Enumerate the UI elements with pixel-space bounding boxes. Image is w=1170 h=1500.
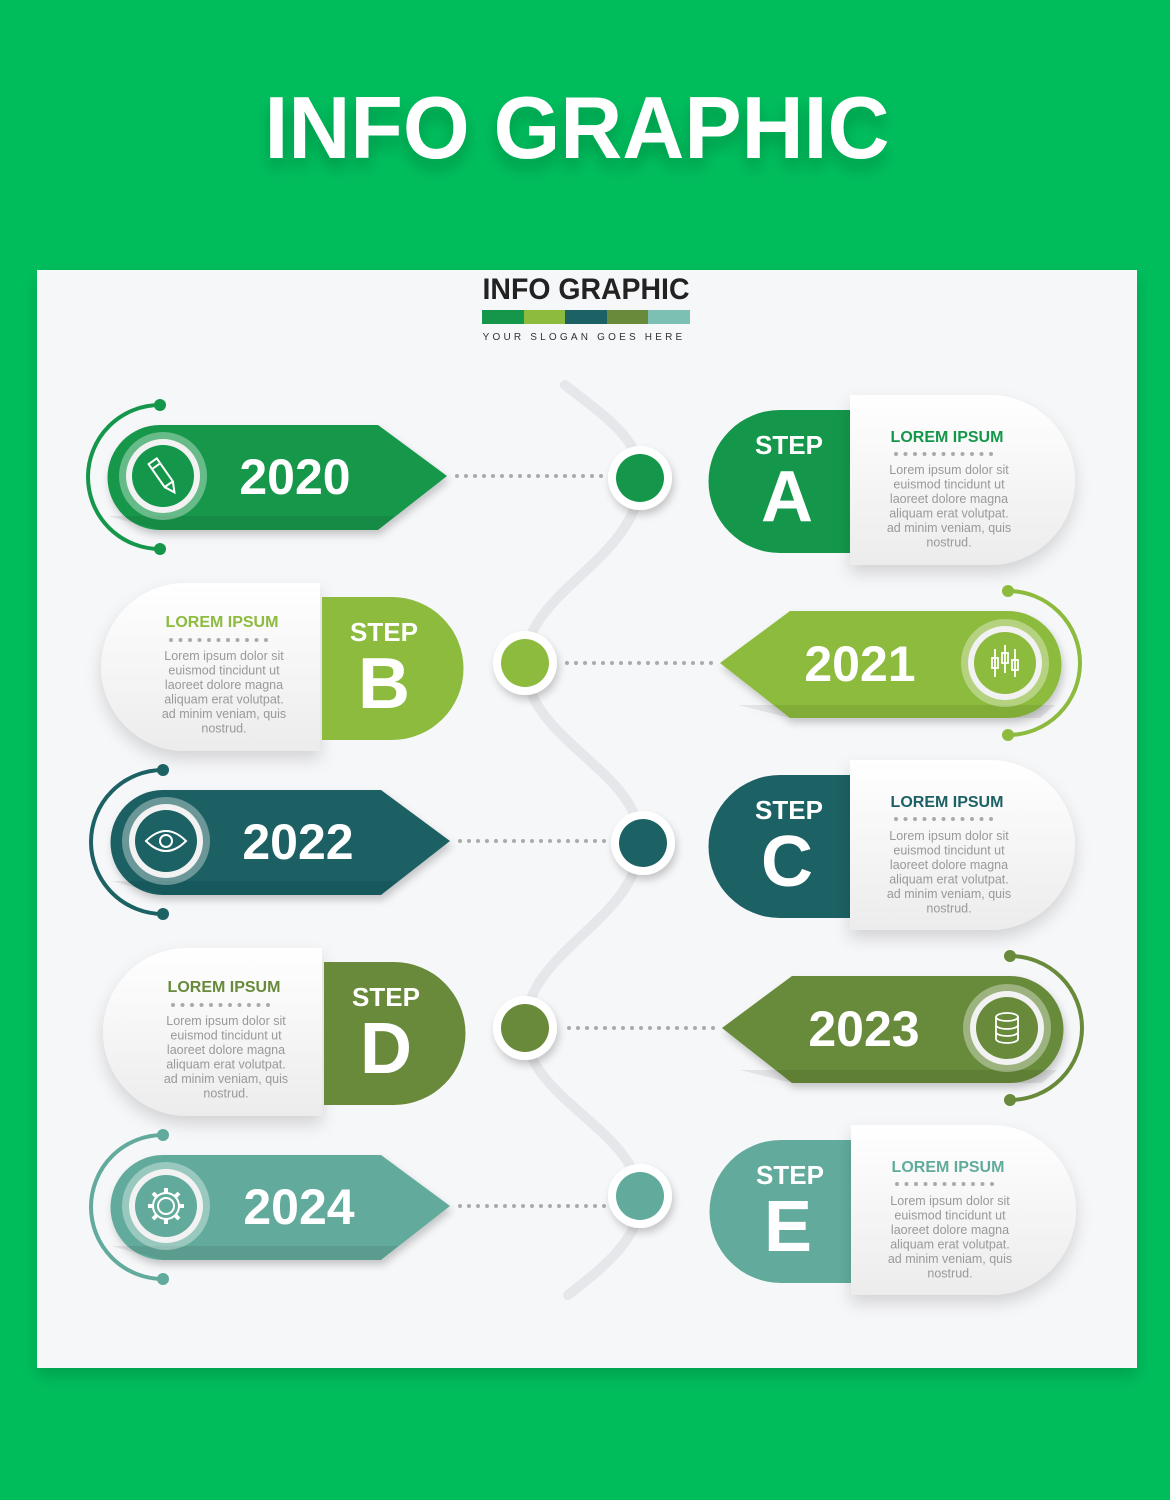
banner 2021 (720, 611, 1061, 718)
header logo: INFO GRAPHIC (482, 273, 690, 306)
card D: laoreet dolore magna (167, 1043, 285, 1057)
card E (851, 1125, 1076, 1295)
card B (101, 583, 320, 751)
node B (493, 631, 557, 695)
step A pill: A (761, 457, 813, 537)
banner 2022 (110, 790, 450, 895)
card A: LOREM IPSUM (891, 429, 1003, 446)
card C: nostrud. (926, 902, 972, 916)
step B pill: B (358, 644, 410, 724)
node E (608, 1164, 672, 1228)
card D: euismod tincidunt ut (170, 1028, 282, 1042)
step C pill: C (761, 822, 813, 902)
card A: nostrud. (926, 536, 972, 550)
step D pill: D (360, 1009, 412, 1089)
row 2021 / step B (101, 583, 1080, 751)
card B: LOREM IPSUM (166, 614, 278, 631)
card C: ad minim veniam, quis (887, 887, 1011, 901)
row 2023 / step D (103, 948, 1082, 1116)
card A: laoreet dolore magna (890, 492, 1008, 506)
step D pill: STEP (352, 982, 420, 1012)
arc B (1002, 585, 1080, 741)
banner 2024 (110, 1155, 450, 1260)
step E pill: E (764, 1187, 812, 1267)
card D: LOREM IPSUM (168, 979, 280, 996)
dotted connector (460, 1204, 606, 1208)
card C (850, 760, 1075, 930)
row 2020 / step A (88, 395, 1075, 565)
card A: Lorem ipsum dolor sit (889, 463, 1009, 477)
card B: Lorem ipsum dolor sit (164, 649, 284, 663)
icon: gear (122, 1162, 210, 1250)
year 2023: 2023 (808, 1001, 920, 1057)
step A pill (708, 410, 850, 553)
arc D (1004, 950, 1082, 1106)
arc C (91, 764, 169, 920)
dotted connector (460, 839, 606, 843)
card B: aliquam erat volutpat. (164, 692, 284, 706)
step A pill: STEP (755, 430, 823, 460)
step E pill (710, 1140, 851, 1283)
dotted connector (567, 661, 712, 665)
card E: ad minim veniam, quis (888, 1252, 1012, 1266)
icon: eye (122, 797, 210, 885)
header logo (482, 273, 690, 343)
year 2020: 2020 (239, 449, 351, 505)
node A (608, 446, 672, 510)
header logo: YOUR SLOGAN GOES HERE (483, 332, 685, 343)
card E: Lorem ipsum dolor sit (890, 1194, 1010, 1208)
row 2024 / step E (91, 1125, 1076, 1295)
card D: ad minim veniam, quis (164, 1072, 288, 1086)
card B: euismod tincidunt ut (168, 664, 280, 678)
card D: aliquam erat volutpat. (166, 1058, 286, 1072)
card C: LOREM IPSUM (891, 794, 1003, 811)
row 2022 / step C (91, 760, 1075, 930)
card A (850, 395, 1075, 565)
card E: aliquam erat volutpat. (890, 1238, 1010, 1252)
icon: pencil (119, 432, 207, 520)
card A: euismod tincidunt ut (893, 478, 1005, 492)
panel: main card (37, 270, 1137, 1368)
title: INFO GRAPHIC (264, 78, 890, 177)
year 2024: 2024 (243, 1179, 355, 1235)
card D: Lorem ipsum dolor sit (166, 1014, 286, 1028)
card A: aliquam erat volutpat. (889, 506, 1009, 520)
dotted connector (569, 1026, 714, 1030)
arc E (91, 1129, 169, 1285)
icon: coins (963, 984, 1051, 1072)
banner 2023 (722, 976, 1063, 1083)
card D: nostrud. (203, 1086, 249, 1100)
card E: LOREM IPSUM (892, 1159, 1004, 1176)
card E: nostrud. (927, 1266, 973, 1280)
year 2022: 2022 (242, 814, 354, 870)
card B: ad minim veniam, quis (162, 707, 286, 721)
card B: laoreet dolore magna (165, 678, 283, 692)
step B pill (322, 597, 463, 740)
icon: candlestick (961, 619, 1049, 707)
node C (611, 811, 675, 875)
card B: nostrud. (201, 722, 247, 736)
step B pill: STEP (350, 617, 418, 647)
wavy timeline path (525, 385, 640, 1295)
dotted connector (457, 474, 603, 478)
card E: euismod tincidunt ut (894, 1208, 1006, 1222)
banner 2020 (108, 425, 447, 530)
year 2021: 2021 (804, 636, 916, 692)
card E: laoreet dolore magna (891, 1223, 1009, 1237)
step E pill: STEP (756, 1160, 824, 1190)
arc A (88, 399, 166, 555)
step C pill (708, 775, 850, 918)
step D pill (324, 962, 465, 1105)
card C: Lorem ipsum dolor sit (889, 829, 1009, 843)
step C pill: STEP (755, 795, 823, 825)
card D (103, 948, 322, 1116)
card C: euismod tincidunt ut (893, 844, 1005, 858)
card C: laoreet dolore magna (890, 858, 1008, 872)
card A: ad minim veniam, quis (887, 521, 1011, 535)
node D (493, 996, 557, 1060)
card C: aliquam erat volutpat. (889, 872, 1009, 886)
